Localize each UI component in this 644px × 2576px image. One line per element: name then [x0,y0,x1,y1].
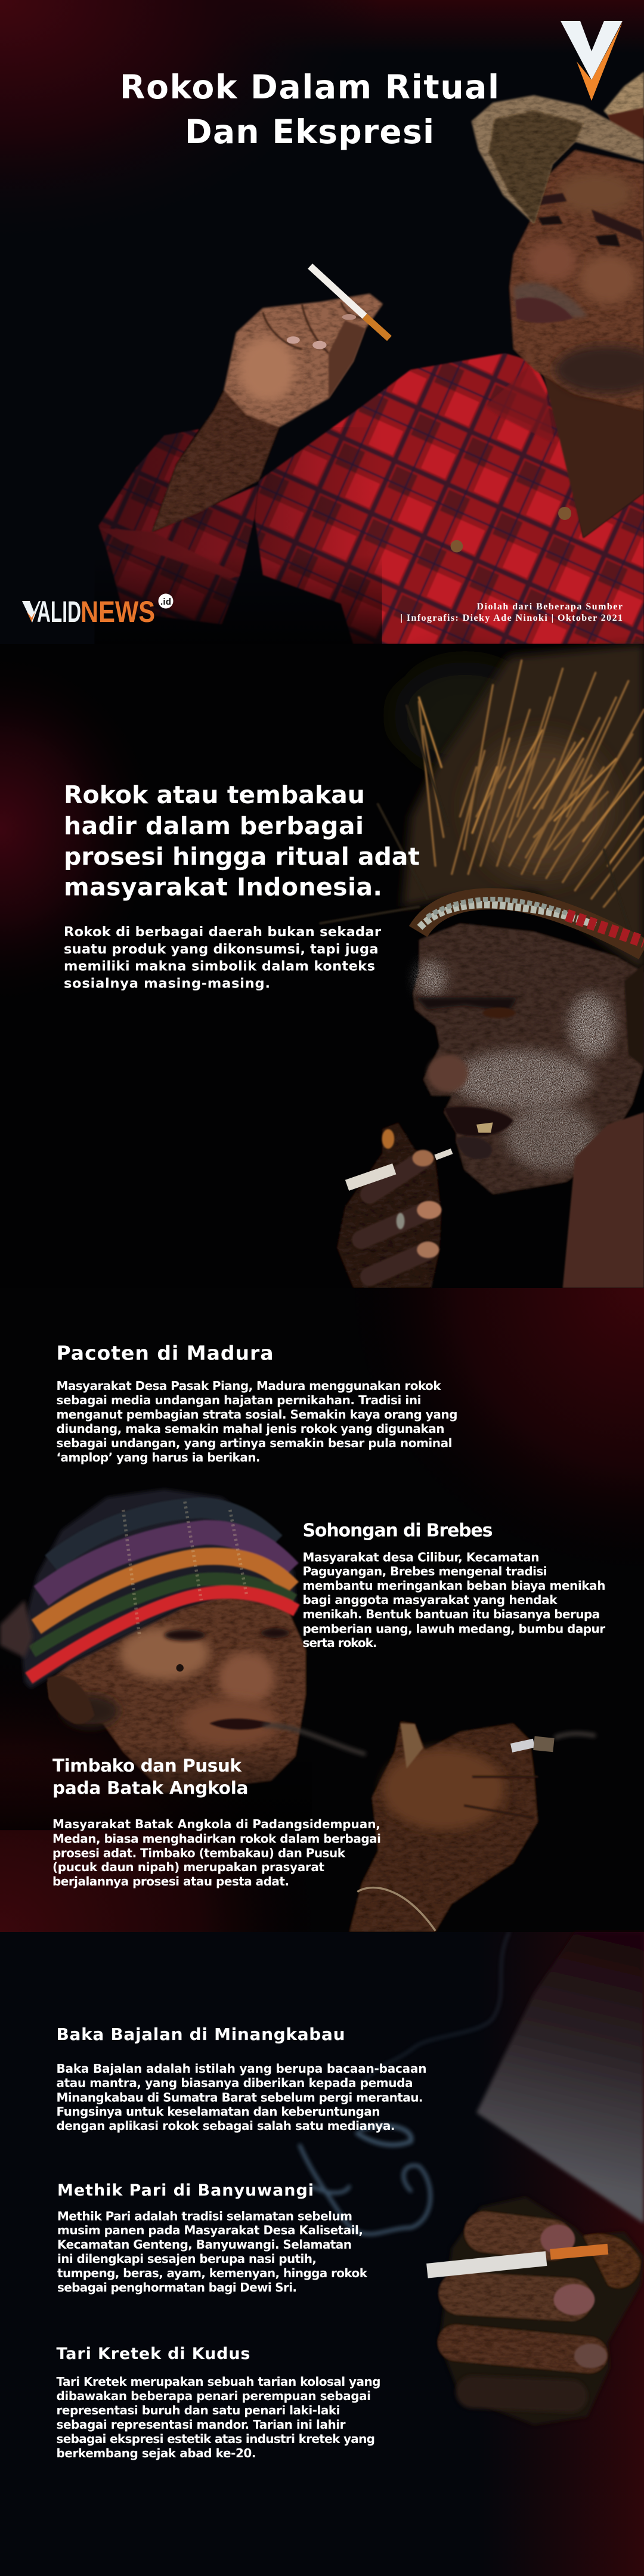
photo: man with hat and cigarette [94,72,644,644]
logo: Validnews wordmark: ALID [37,595,81,628]
section: Tari Kretek: representasi buruh dan satu penari laki-laki [56,2403,340,2417]
section: Methik Pari: tumpeng, beras, ayam, kemenyan, hingga rokok [57,2266,368,2280]
bracelet [357,1888,435,1931]
section: Pacoten di Madura: sebagai media undangan hajatan pernikahan. Tradisi ini [56,1393,421,1407]
section: Timbako dan Pusuk: Masyarakat Batak Angkola di Padangsidempuan, [52,1817,380,1831]
face [47,1594,306,1793]
title: Dan Ekspresi [185,113,434,151]
section: Sohongan di Brebes: menikah. Bentuk bantuan itu biasanya berupa [303,1607,600,1621]
smoking hand [337,1122,441,1288]
heading: masyarakat Indonesia. [64,873,382,902]
shoulder [563,1112,644,1288]
hand-rolled cigarette [347,1169,394,1185]
section: Pacoten di Madura [56,1342,458,1465]
source credit [401,602,623,623]
section: Tari Kretek: dibawakan beberapa penari perempuan sebagai [56,2389,371,2403]
section: Sohongan di Brebes: bagi anggota masyarakat yang hendak [303,1593,558,1607]
section: Baka Bajalan: Fungsinya untuk keselamatan dan keberuntungan [56,2104,380,2119]
hand [224,293,383,427]
ear [624,964,644,1067]
section: Tari Kretek: Tari Kretek merupakan sebuah tarian kolosal yang [56,2374,380,2389]
intro text: Rokok di berbagai daerah bukan sekadar [64,924,382,940]
section: Baka Bajalan: atau mantra, yang biasanya diberikan kepada pemuda [56,2076,413,2090]
panel: traditions part two [0,1932,644,2576]
section: Pacoten di Madura: ‘amplop’ yang harus ia berikan. [56,1450,260,1465]
intro text [64,924,382,991]
section: Timbako dan Pusuk: Medan, biasa menghadirkan rokok dalam berbagai [52,1832,381,1846]
cigarette [512,1743,534,1748]
beaded headband [418,899,644,950]
section: Baka Bajalan: Baka Bajalan di Minangkabau [56,2024,345,2044]
section: Pacoten di Madura: menganut pembagian strata sosial. Semakin kaya orang yang [56,1407,458,1422]
smoke [300,1932,509,2234]
section: Baka Bajalan [56,2024,427,2133]
section: Sohongan di Brebes: pemberian uang, lawuh medang, bumbu dapur [303,1622,605,1636]
cigarette [310,266,365,316]
intro text: suatu produk yang dikonsumsi, tapi juga [64,942,378,957]
face [413,923,644,1194]
hand [439,2197,644,2425]
logo: Validnews wordmark: NEWS [80,595,155,628]
section: Sohongan di Brebes [303,1521,606,1650]
neck [542,370,644,538]
panel: cover [0,0,644,644]
logo: Validnews wordmark [22,594,173,628]
section: Pacoten di Madura: sebagai undangan, yang artinya semakin besar pula nominal [56,1436,452,1450]
rolled sleeve [98,429,259,624]
heading: Rokok atau tembakau [64,781,365,809]
section: Methik Pari: Methik Pari adalah tradisi selamatan sebelum [57,2209,352,2223]
section: Methik Pari: Methik Pari di Banyuwangi [57,2181,314,2200]
title [120,68,499,151]
section: Sohongan di Brebes: serta rokok. [303,1636,377,1650]
section: Tari Kretek: sebagai ekspresi estetik atas industri kretek yang [56,2432,375,2446]
section: Timbako dan Pusuk: Timbako dan Pusuk [52,1755,242,1776]
section: Baka Bajalan: Baka Bajalan adalah istilah yang berupa bacaan-bacaan [56,2061,427,2076]
feathers [402,644,644,973]
panel: traditions part one [0,1288,644,1932]
section: Tari Kretek: Tari Kretek di Kudus [56,2345,250,2363]
heading: hadir dalam berbagai [64,812,364,840]
cigarette [427,2259,546,2271]
smoke [263,1725,596,1754]
logo: Validnews wordmark: .id [160,597,171,607]
section: Timbako dan Pusuk: berjalannya prosesi atau pesta adat. [52,1874,289,1888]
section: Sohongan di Brebes: membantu meringankan beban biaya menikah [303,1578,606,1593]
ear [47,1676,94,1724]
head wrap [20,1490,296,1689]
intro text: sosialnya masing-masing. [64,976,270,991]
source credit: Diolah dari Beberapa Sumber [477,602,623,612]
photo: elder with head wrap and hand with cigarette [0,1490,596,1932]
section: Timbako dan Pusuk: prosesi adat. Timbako (tembakau) dan Pusuk [52,1846,346,1860]
title: Rokok Dalam Ritual [120,68,499,106]
section: Baka Bajalan: dengan aplikasi rokok sebagai salah satu medianya. [56,2119,395,2133]
section: Methik Pari: sebagai penghormatan bagi Dewi Sri. [57,2280,297,2295]
face [509,150,644,411]
shirt collar and buttons [485,366,555,444]
straw hat [604,72,644,119]
section: Sohongan di Brebes: Sohongan di Brebes [303,1521,493,1541]
section: Tari Kretek: sebagai representasi mandor. Tarian ini lahir [56,2417,346,2432]
section: Pacoten di Madura: Pacoten di Madura [56,1342,273,1364]
section: Methik Pari: ini dilengkapi sesajen berupa nasi putih, [57,2252,317,2266]
sleeve [476,1932,644,2224]
section: Methik Pari [57,2181,368,2295]
section: Sohongan di Brebes: Masyarakat desa Cilibur, Kecamatan [303,1550,539,1565]
heading: prosesi hingga ritual adat [64,842,420,871]
photo: Papuan man with feather headdress [320,644,644,1288]
section: Timbako dan Pusuk: (pucuk daun nipah) merupakan prasyarat [52,1860,324,1874]
shade over lower face [0,1744,312,1830]
section: Pacoten di Madura: diundang, maka semakin mahal jenis rokok yang digunakan [56,1422,445,1436]
hand [349,1722,538,1932]
forearm [152,390,279,532]
section: Methik Pari: Kecamatan Genteng, Banyuwangi. Selamatan [57,2237,352,2252]
section: Timbako dan Pusuk [52,1755,381,1888]
photo: hand holding cigarette with smoke [300,1932,644,2425]
section: Baka Bajalan: Minangkabau di Sumatra Barat sebelum pergi merantau. [56,2091,423,2105]
source credit: | Infografis: Dieky Ade Ninoki | Oktober 2021 [401,613,623,623]
intro text: memiliki makna simbolik dalam konteks [64,959,375,974]
section: Tari Kretek [56,2345,380,2460]
section: Timbako dan Pusuk: pada Batak Angkola [52,1778,248,1798]
section: Sohongan di Brebes: Paguyangan, Brebes mengenal tradisi [303,1564,547,1578]
section: Tari Kretek: berkembang sejak abad ke-20. [56,2446,256,2460]
section: Pacoten di Madura: Masyarakat Desa Pasak Piang, Madura menggunakan rokok [56,1379,441,1393]
section: Methik Pari: musim panen pada Masyarakat Desa Kalisetail, [57,2223,363,2237]
shirt [255,353,644,644]
heading [64,781,420,902]
panel: intro [0,644,644,1288]
logo: V mark [561,21,623,101]
